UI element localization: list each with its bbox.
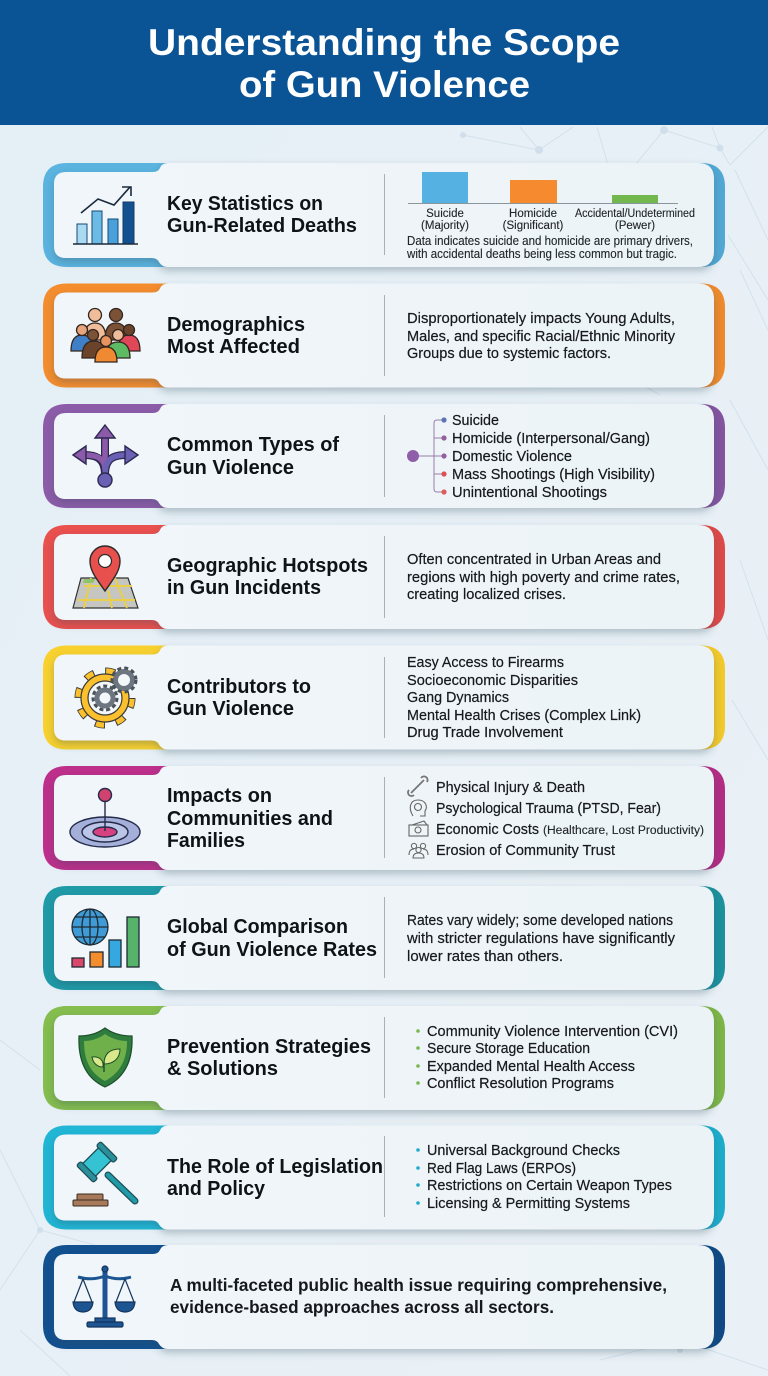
icon: gavel xyxy=(73,1141,135,1206)
description: Often concentrated in Urban Areas and xyxy=(407,552,661,568)
tree list of violence types: Domestic Violence xyxy=(452,449,572,465)
list of impacts with icons: Psychological Trauma (PTSD, Fear) xyxy=(436,801,661,817)
chart note: with accidental deaths being less common but tragic. xyxy=(406,247,677,261)
tree list of violence types: Suicide xyxy=(452,413,499,429)
icon: target with pin xyxy=(70,788,140,847)
description: Disproportionately impacts Young Adults, xyxy=(407,311,675,327)
list of contributors: Easy Access to Firearms xyxy=(407,655,564,671)
list of impacts with icons: Economic Costs xyxy=(436,822,539,838)
heading xyxy=(167,193,357,237)
heading: Gun-Related Deaths xyxy=(167,215,357,237)
heading: Contributors to xyxy=(167,676,311,698)
icon: group of people xyxy=(71,308,140,362)
icon: scales of justice xyxy=(73,1266,135,1327)
bullet list xyxy=(416,1143,672,1212)
heading xyxy=(167,785,333,852)
heading xyxy=(167,676,311,720)
list of impacts with icons: Erosion of Community Trust xyxy=(436,843,615,859)
heading: Most Affected xyxy=(167,336,300,358)
heading: Geographic Hotspots xyxy=(167,555,368,577)
header banner xyxy=(0,0,768,125)
icon: branching arrows xyxy=(73,425,138,487)
list of contributors: Socioeconomic Disparities xyxy=(407,673,578,689)
bullet list: Conflict Resolution Programs xyxy=(427,1076,614,1092)
list of contributors: Drug Trade Involvement xyxy=(407,725,563,741)
description: Males, and specific Racial/Ethnic Minority xyxy=(407,329,676,345)
heading: Families xyxy=(167,830,245,852)
heading: and Policy xyxy=(167,1178,266,1200)
panel: geographic hotspots xyxy=(43,525,725,629)
bar chart: deaths by type: (Significant) xyxy=(503,220,564,232)
bullet list: Red Flag Laws (ERPOs) xyxy=(427,1161,576,1177)
heading: Impacts on xyxy=(167,785,272,807)
bar chart: deaths by type xyxy=(408,172,695,232)
closing statement xyxy=(170,1275,667,1317)
description: lower rates than others. xyxy=(407,949,563,965)
panel: key statistics xyxy=(43,163,725,267)
bullet list: Secure Storage Education xyxy=(427,1041,590,1057)
icon: rising bar chart xyxy=(73,187,138,244)
description: regions with high poverty and crime rates, xyxy=(407,570,680,586)
list of contributors: Mental Health Crises (Complex Link) xyxy=(407,708,641,724)
bullet list: Licensing & Permitting Systems xyxy=(427,1196,630,1212)
bar chart: deaths by type: Homicide xyxy=(509,208,557,220)
icon: head xyxy=(410,800,426,816)
icon: gears xyxy=(78,668,136,725)
heading: Key Statistics on xyxy=(167,193,323,215)
panel: impacts xyxy=(43,766,725,870)
bar chart: deaths by type: Accidental/Undetermined xyxy=(575,208,695,220)
list of impacts with icons: Physical Injury & Death xyxy=(436,780,585,796)
panel: prevention xyxy=(43,1006,725,1110)
tree list of violence types: Mass Shootings (High Visibility) xyxy=(452,467,655,483)
heading: The Role of Legislation xyxy=(167,1156,383,1178)
heading: Demographics xyxy=(167,314,305,336)
bar chart: deaths by type: Suicide xyxy=(426,208,464,220)
heading: Gun Violence xyxy=(167,457,294,479)
heading xyxy=(167,555,368,599)
icon: map with pin xyxy=(73,546,138,608)
bullet list: Expanded Mental Health Access xyxy=(427,1059,635,1075)
title: Understanding the Scope xyxy=(148,22,620,63)
heading xyxy=(167,1156,383,1200)
heading: in Gun Incidents xyxy=(167,577,321,599)
heading: & Solutions xyxy=(167,1058,278,1080)
icon: cash xyxy=(409,821,428,836)
bar chart: deaths by type: (Majority) xyxy=(421,220,469,232)
list of impacts with icons xyxy=(408,776,704,859)
title: of Gun Violence xyxy=(239,64,530,105)
bullet list xyxy=(416,1024,678,1092)
heading: Common Types of xyxy=(167,434,339,456)
description: with stricter regulations have significantly xyxy=(406,931,676,947)
heading xyxy=(167,916,377,961)
list of contributors: Gang Dynamics xyxy=(407,690,509,706)
bullet list: Universal Background Checks xyxy=(427,1143,620,1159)
panel: demographics xyxy=(43,284,725,388)
closing statement: A multi-faceted public health issue requiring comprehensive, xyxy=(170,1275,667,1295)
tree list of violence types: Unintentional Shootings xyxy=(452,485,607,501)
panel: legislation xyxy=(43,1126,725,1230)
tree list of violence types: Homicide (Interpersonal/Gang) xyxy=(452,431,650,447)
chart note: Data indicates suicide and homicide are primary drivers, xyxy=(407,234,693,248)
tree list of violence types xyxy=(407,413,655,501)
bullet list: Community Violence Intervention (CVI) xyxy=(427,1024,678,1040)
icon: bone xyxy=(408,776,428,796)
description: creating localized crises. xyxy=(407,587,566,603)
description: Rates vary widely; some developed nations xyxy=(407,913,673,929)
heading xyxy=(167,1036,371,1080)
description xyxy=(407,311,676,362)
description xyxy=(406,913,676,965)
icon: community xyxy=(409,843,428,858)
panel: global comparison xyxy=(43,886,725,990)
description xyxy=(407,552,680,603)
bullet list: Restrictions on Certain Weapon Types xyxy=(427,1178,672,1194)
title xyxy=(148,22,620,105)
chart note xyxy=(406,234,693,261)
description: Groups due to systemic factors. xyxy=(407,346,611,362)
heading xyxy=(167,314,305,358)
heading: Prevention Strategies xyxy=(167,1036,371,1058)
panel: types of violence xyxy=(43,404,725,508)
icon: shield with leaves xyxy=(79,1028,132,1087)
panel: contributors xyxy=(43,646,725,750)
list of contributors xyxy=(407,655,641,741)
heading: of Gun Violence Rates xyxy=(167,939,377,961)
closing statement: evidence-based approaches across all sectors. xyxy=(170,1297,554,1317)
list of impacts with icons: (Healthcare, Lost Productivity) xyxy=(543,825,704,837)
icon: globe and bars xyxy=(72,909,139,967)
bar chart: deaths by type: (Pewer) xyxy=(615,220,655,232)
heading: Global Comparison xyxy=(167,916,348,938)
heading xyxy=(167,434,339,479)
heading: Communities and xyxy=(167,808,333,830)
heading: Gun Violence xyxy=(167,698,294,720)
panel: conclusion xyxy=(43,1245,725,1349)
